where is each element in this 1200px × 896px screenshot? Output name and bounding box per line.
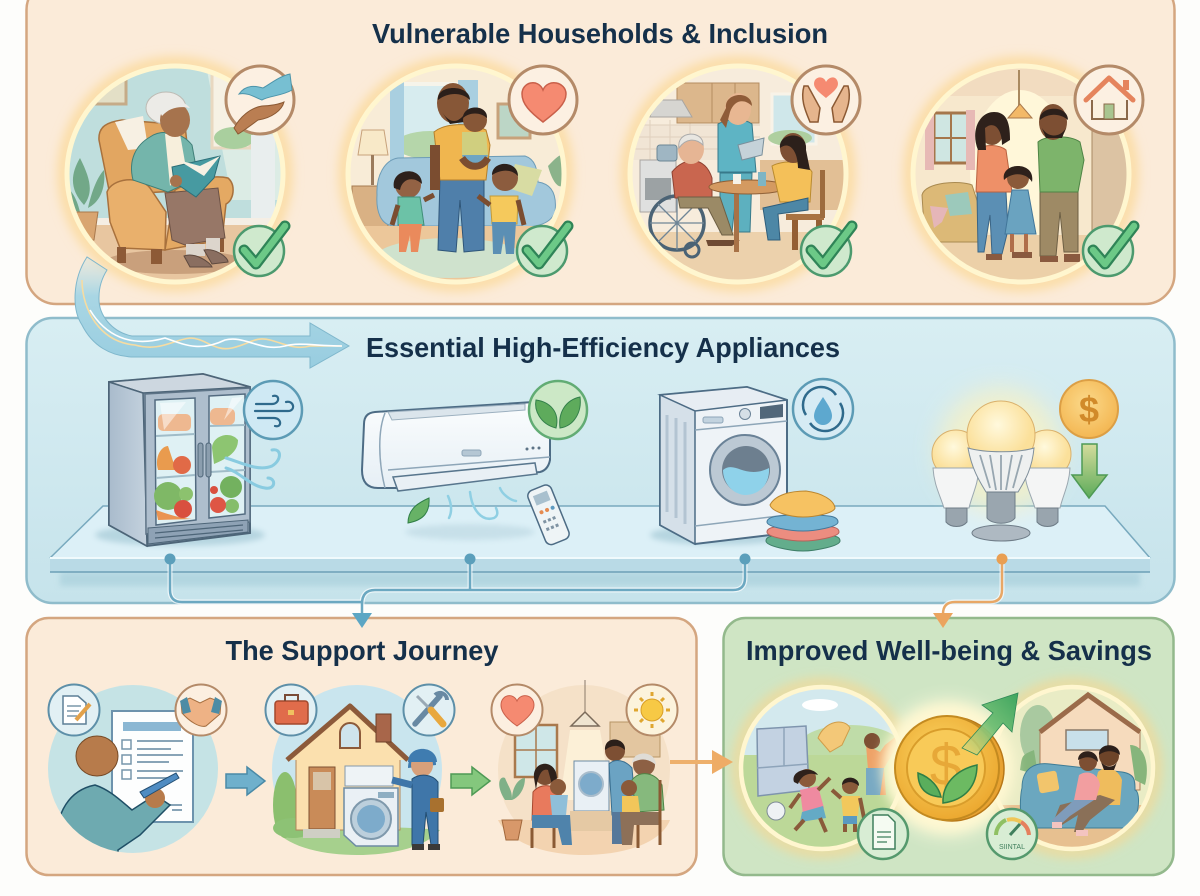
scene: family at home [908, 60, 1138, 295]
icon: energy gauge [987, 809, 1037, 859]
central glow [863, 683, 1033, 853]
icon: dollar coin [1060, 380, 1118, 438]
icon: energy gauge: SIINTAL [999, 844, 1025, 851]
icon: bill [858, 809, 908, 859]
appliance: LED bulbs [932, 388, 1071, 541]
cool air and leaf [408, 488, 516, 523]
scene: father with children [340, 60, 570, 296]
scene: children playing outdoors [735, 680, 910, 855]
icon: heart [509, 66, 577, 134]
scene: carer visiting household [625, 60, 855, 292]
icon: water cycle [793, 379, 853, 439]
step: technician installs at home [272, 685, 444, 855]
airflow lines [226, 450, 280, 488]
arrow: households flow to appliances [75, 257, 349, 368]
icon: house [1075, 66, 1143, 134]
icon: gold coin with sprout: $ [930, 733, 962, 798]
icon: gold coin with sprout [882, 702, 1014, 834]
panel: vulnerable households [26, 0, 1174, 304]
icon: dollar coin: $ [1079, 389, 1099, 430]
connector: appliances to support journey [164, 554, 750, 628]
icon: document [48, 684, 100, 736]
arrow: cost down [1072, 444, 1107, 498]
icon: leaf [529, 381, 587, 439]
arrow: step two to three [451, 767, 490, 795]
arrow: step one to two [226, 767, 265, 795]
icon: check mark [517, 226, 568, 276]
step: family with new appliance [498, 680, 670, 855]
appliance: air conditioner [362, 401, 550, 540]
folded towels [766, 491, 840, 551]
appliance: refrigerator [95, 374, 265, 546]
icon: check mark [1083, 226, 1134, 276]
heading: vulnerable households: Vulnerable Households & Inclusion [372, 18, 828, 49]
heading: well-being and savings: Improved Well-being & Savings [746, 635, 1152, 666]
arrow: rising savings [962, 693, 1018, 755]
appliance: washing machine [650, 387, 790, 545]
icon: sun [626, 684, 678, 736]
icon: heart [492, 684, 542, 736]
icon: handshake [176, 684, 226, 736]
remote control [526, 483, 571, 546]
heading: appliances: Essential High-Efficiency Appliances [366, 332, 840, 363]
arrow: journey to well-being [670, 750, 733, 774]
connector: bulbs to well-being [933, 554, 1008, 628]
scene: couple on sofa [985, 680, 1160, 860]
icon: wrench and screwdriver [404, 684, 454, 736]
step: application form [48, 685, 218, 870]
scene: elderly woman reading [60, 60, 290, 290]
shelf [50, 506, 1150, 586]
icon: check mark [801, 226, 852, 276]
panel: essential appliances [26, 318, 1174, 603]
icon: helping hands [226, 66, 294, 134]
heading: support journey: The Support Journey [226, 635, 499, 666]
icon: caring hands [792, 66, 860, 134]
icon: check mark [234, 226, 285, 276]
panel: the support journey [26, 618, 696, 875]
panel: improved well-being and savings [724, 618, 1174, 875]
icon: wind [244, 381, 302, 439]
icon: toolbox [266, 684, 316, 736]
